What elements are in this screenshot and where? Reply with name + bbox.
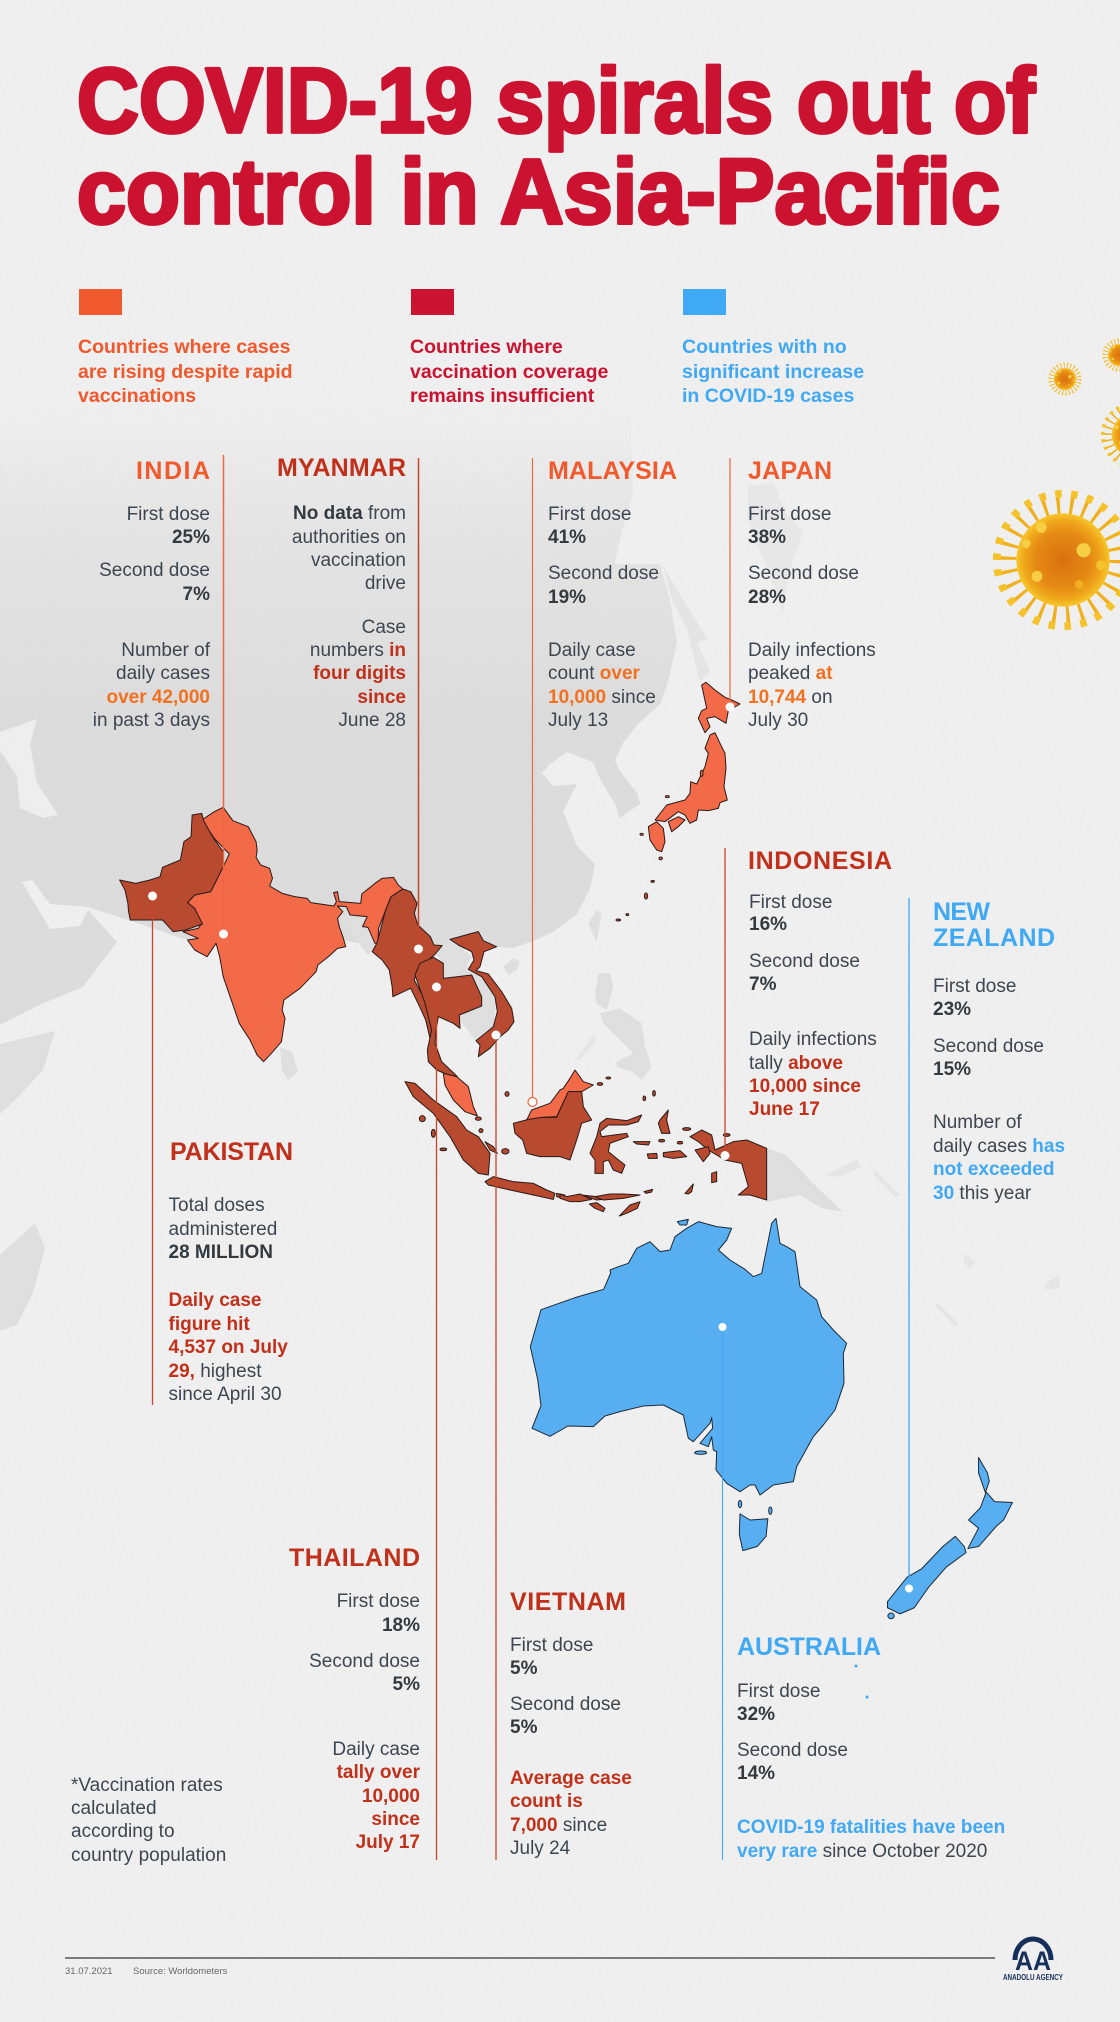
panel: India: Number of [121, 640, 211, 661]
panel: India: daily cases [116, 663, 210, 684]
panel: Australia: COVID-19 fatalities have been [737, 1817, 1005, 1838]
panel: Indonesia: tally above [749, 1053, 843, 1074]
panel: Indonesia: June 17 [749, 1099, 820, 1120]
panel: Myanmar: vaccination [311, 550, 406, 571]
legend: insufficient vaccination coverage: Countries where [410, 336, 563, 358]
panel: Thailand: tally over [337, 1762, 421, 1783]
footnote [71, 1775, 226, 1866]
panel: Vietnam: 5% [510, 1717, 538, 1738]
panel: Malaysia: Second dose [548, 563, 659, 584]
panel: Myanmar: authorities on [292, 527, 406, 548]
panel: Myanmar: Case [362, 617, 406, 638]
panel: Vietnam: VIETNAM [510, 1588, 626, 1616]
panel: Malaysia: Daily case [548, 640, 636, 661]
panel: Japan: 38% [748, 527, 786, 548]
base map: grey landmasses [0, 400, 1060, 1331]
title: control in Asia-Pacific [77, 141, 1000, 243]
leader line: India [219, 455, 228, 938]
panel: Pakistan: 4,537 on July [168, 1337, 288, 1358]
legend: no significant increase: Countries with no [682, 336, 847, 358]
panel: Japan: Second dose [748, 563, 859, 584]
logo: Anadolu Agency: ANADOLU AGENCY [1003, 1973, 1064, 1982]
panel: Pakistan: 28 MILLION [168, 1242, 273, 1263]
panel: Malaysia: 10,000 since [548, 687, 656, 708]
panel: Pakistan: since April 30 [168, 1384, 282, 1405]
panel: Malaysia: MALAYSIA [548, 457, 677, 485]
logo: Anadolu Agency [1003, 1939, 1064, 1982]
panel: Indonesia: INDONESIA [748, 847, 892, 875]
title: COVID-19 spirals out of [77, 50, 1035, 152]
India [183, 807, 403, 1062]
panel: India: 25% [172, 527, 210, 548]
panel: Thailand: July 17 [356, 1832, 420, 1853]
panel: Myanmar [277, 454, 406, 731]
icon: virus small top right [1103, 339, 1120, 371]
panel: Australia: AUSTRALIA [737, 1633, 881, 1661]
icon: virus small left [1049, 363, 1081, 395]
logo: Anadolu Agency: AA [1015, 1946, 1051, 1976]
panel: Thailand: Second dose [309, 1651, 420, 1672]
leader line: Indonesia [720, 848, 730, 1160]
panel: New Zealand: 23% [933, 999, 971, 1020]
legend: insufficient vaccination coverage: remains insufficient [410, 385, 595, 407]
panel: Malaysia [548, 457, 677, 731]
leader line: New Zealand [905, 898, 913, 1592]
leader line: Malaysia [528, 458, 537, 1106]
panel: Pakistan [168, 1138, 293, 1405]
panel: New Zealand [933, 898, 1065, 1204]
panel: Thailand: 10,000 [362, 1786, 420, 1807]
panel: Vietnam: Average case [510, 1768, 632, 1789]
panel: Myanmar: drive [365, 573, 406, 594]
panel: Indonesia: 16% [749, 914, 787, 935]
footnote: according to [71, 1821, 175, 1842]
panel: Pakistan: Daily case [168, 1290, 261, 1311]
panel: India: over 42,000 [106, 687, 210, 708]
panel: Thailand: since [371, 1809, 420, 1830]
legend: no significant increase: in COVID-19 cases [682, 385, 854, 407]
legend: rising despite rapid vaccinations: are rising despite rapid [78, 361, 293, 383]
legend: rising despite rapid vaccinations: Countries where cases [78, 336, 291, 358]
panel: Myanmar: four digits [313, 663, 406, 684]
Malaysia [443, 1070, 593, 1120]
panel: New Zealand: daily cases has [933, 1136, 1065, 1157]
panel: Indonesia: First dose [749, 892, 832, 913]
Pakistan [120, 813, 223, 932]
legend: insufficient vaccination coverage: vaccination coverage [410, 361, 608, 383]
map: Tasmania and New Zealand [739, 1458, 1012, 1619]
panel: Pakistan: Total doses [168, 1195, 265, 1216]
panel: Australia: 14% [737, 1763, 775, 1784]
panel: India: in past 3 days [93, 710, 210, 731]
panel: Indonesia: Second dose [749, 951, 860, 972]
panel: Australia [737, 1633, 1005, 1862]
panel: Vietnam: 5% [510, 1658, 538, 1679]
panel: Indonesia: 10,000 since [749, 1076, 861, 1097]
panel: Thailand: THAILAND [289, 1544, 420, 1572]
panel: New Zealand: Number of [933, 1112, 1022, 1133]
panel: India: 7% [183, 584, 210, 605]
panel: Australia: very rare since October 2020 [737, 1841, 987, 1862]
panel: Malaysia: 19% [548, 587, 586, 608]
Indonesia [405, 880, 767, 1200]
legend: rising despite rapid vaccinations [78, 289, 293, 407]
panel: Australia: Second dose [737, 1740, 848, 1761]
map: Japan [640, 682, 740, 860]
panel: Vietnam: First dose [510, 1635, 593, 1656]
panel: Indonesia [748, 847, 892, 1120]
panel: Malaysia: count over [548, 663, 641, 684]
panel: New Zealand: Second dose [933, 1036, 1044, 1057]
panel: Vietnam [510, 1588, 632, 1859]
footnote: country population [71, 1845, 226, 1866]
panel: Pakistan: 29, highest [168, 1361, 262, 1382]
panel: Japan: peaked at [748, 663, 833, 684]
legend: insufficient vaccination coverage [410, 289, 608, 407]
panel: Malaysia: 41% [548, 527, 586, 548]
panel: India: INDIA [136, 457, 210, 485]
panel: New Zealand: 15% [933, 1059, 971, 1080]
map: Southeast Asia [405, 880, 767, 1200]
panel: Thailand [289, 1544, 421, 1853]
map: South Asia and Myanmar [120, 807, 442, 1062]
date and source [65, 1966, 228, 1977]
panel: Thailand: Daily case [332, 1739, 420, 1760]
panel: Malaysia: First dose [548, 504, 631, 525]
footer rule [65, 1957, 995, 1959]
date and source: Source: Worldometers [133, 1966, 228, 1977]
icon: virus medium right [1103, 404, 1120, 466]
panel: Myanmar: numbers in [310, 640, 406, 661]
panel: New Zealand: NEW [933, 898, 990, 926]
leader line: Pakistan [148, 892, 157, 1405]
panel: Pakistan: figure hit [168, 1314, 250, 1335]
panel: Australia: First dose [737, 1681, 820, 1702]
leader line: Australia [718, 1323, 726, 1860]
legend: no significant increase [682, 289, 864, 407]
panel: Myanmar: MYANMAR [277, 454, 406, 482]
panel: Japan: First dose [748, 504, 831, 525]
leader line: Myanmar [414, 458, 423, 954]
panel: Vietnam: July 24 [510, 1838, 571, 1859]
panel: Pakistan: PAKISTAN [170, 1138, 293, 1166]
title [77, 50, 1035, 243]
leader line: Japan [726, 458, 734, 712]
panel: Japan: 28% [748, 587, 786, 608]
leader line: Vietnam [492, 1030, 500, 1860]
panel: Malaysia: July 13 [548, 710, 608, 731]
panel: Vietnam: 7,000 since [510, 1815, 607, 1836]
date and source: 31.07.2021 [65, 1966, 113, 1977]
panel: New Zealand: not exceeded [933, 1159, 1054, 1180]
Thailand [415, 957, 482, 1077]
leader line: Thailand [432, 982, 441, 1860]
panel: India: First dose [127, 504, 210, 525]
panel: Myanmar: since [357, 687, 406, 708]
panel: Thailand: 5% [393, 1674, 420, 1695]
panel: Myanmar: No data from [293, 503, 406, 524]
Vietnam [450, 932, 514, 1057]
Tasmania [739, 1514, 768, 1551]
legend: rising despite rapid vaccinations: vaccinations [78, 385, 196, 407]
New Zealand [887, 1458, 1012, 1619]
panel: Thailand: First dose [337, 1591, 420, 1612]
panel: Japan: 10,744 on [748, 687, 833, 708]
footnote: calculated [71, 1798, 157, 1819]
panel: Japan: Daily infections [748, 640, 876, 661]
panel: Japan: JAPAN [748, 457, 832, 485]
panel: Australia: 32% [737, 1704, 775, 1725]
legend: no significant increase: significant increase [682, 361, 864, 383]
footnote: *Vaccination rates [71, 1775, 223, 1796]
panel: Myanmar: June 28 [338, 710, 406, 731]
map: Lesser Sunda islands [560, 1184, 693, 1216]
panel: Pakistan: administered [168, 1219, 277, 1240]
panel: Thailand: 18% [382, 1615, 420, 1636]
panel: Vietnam: count is [510, 1791, 583, 1812]
map: Australia [530, 1218, 847, 1514]
panel: Indonesia: 7% [749, 974, 777, 995]
panel: Japan: July 30 [748, 710, 808, 731]
icon: virus large [997, 494, 1120, 626]
panel: India [93, 457, 211, 731]
panel: Japan [748, 457, 876, 731]
panel: New Zealand: ZEALAND [933, 924, 1055, 952]
panel: Indonesia: Daily infections [749, 1029, 877, 1050]
panel: India: Second dose [99, 560, 210, 581]
panel: Vietnam: Second dose [510, 1694, 621, 1715]
panel: New Zealand: First dose [933, 976, 1016, 997]
Myanmar [372, 889, 442, 1040]
panel: New Zealand: 30 this year [933, 1183, 1032, 1204]
